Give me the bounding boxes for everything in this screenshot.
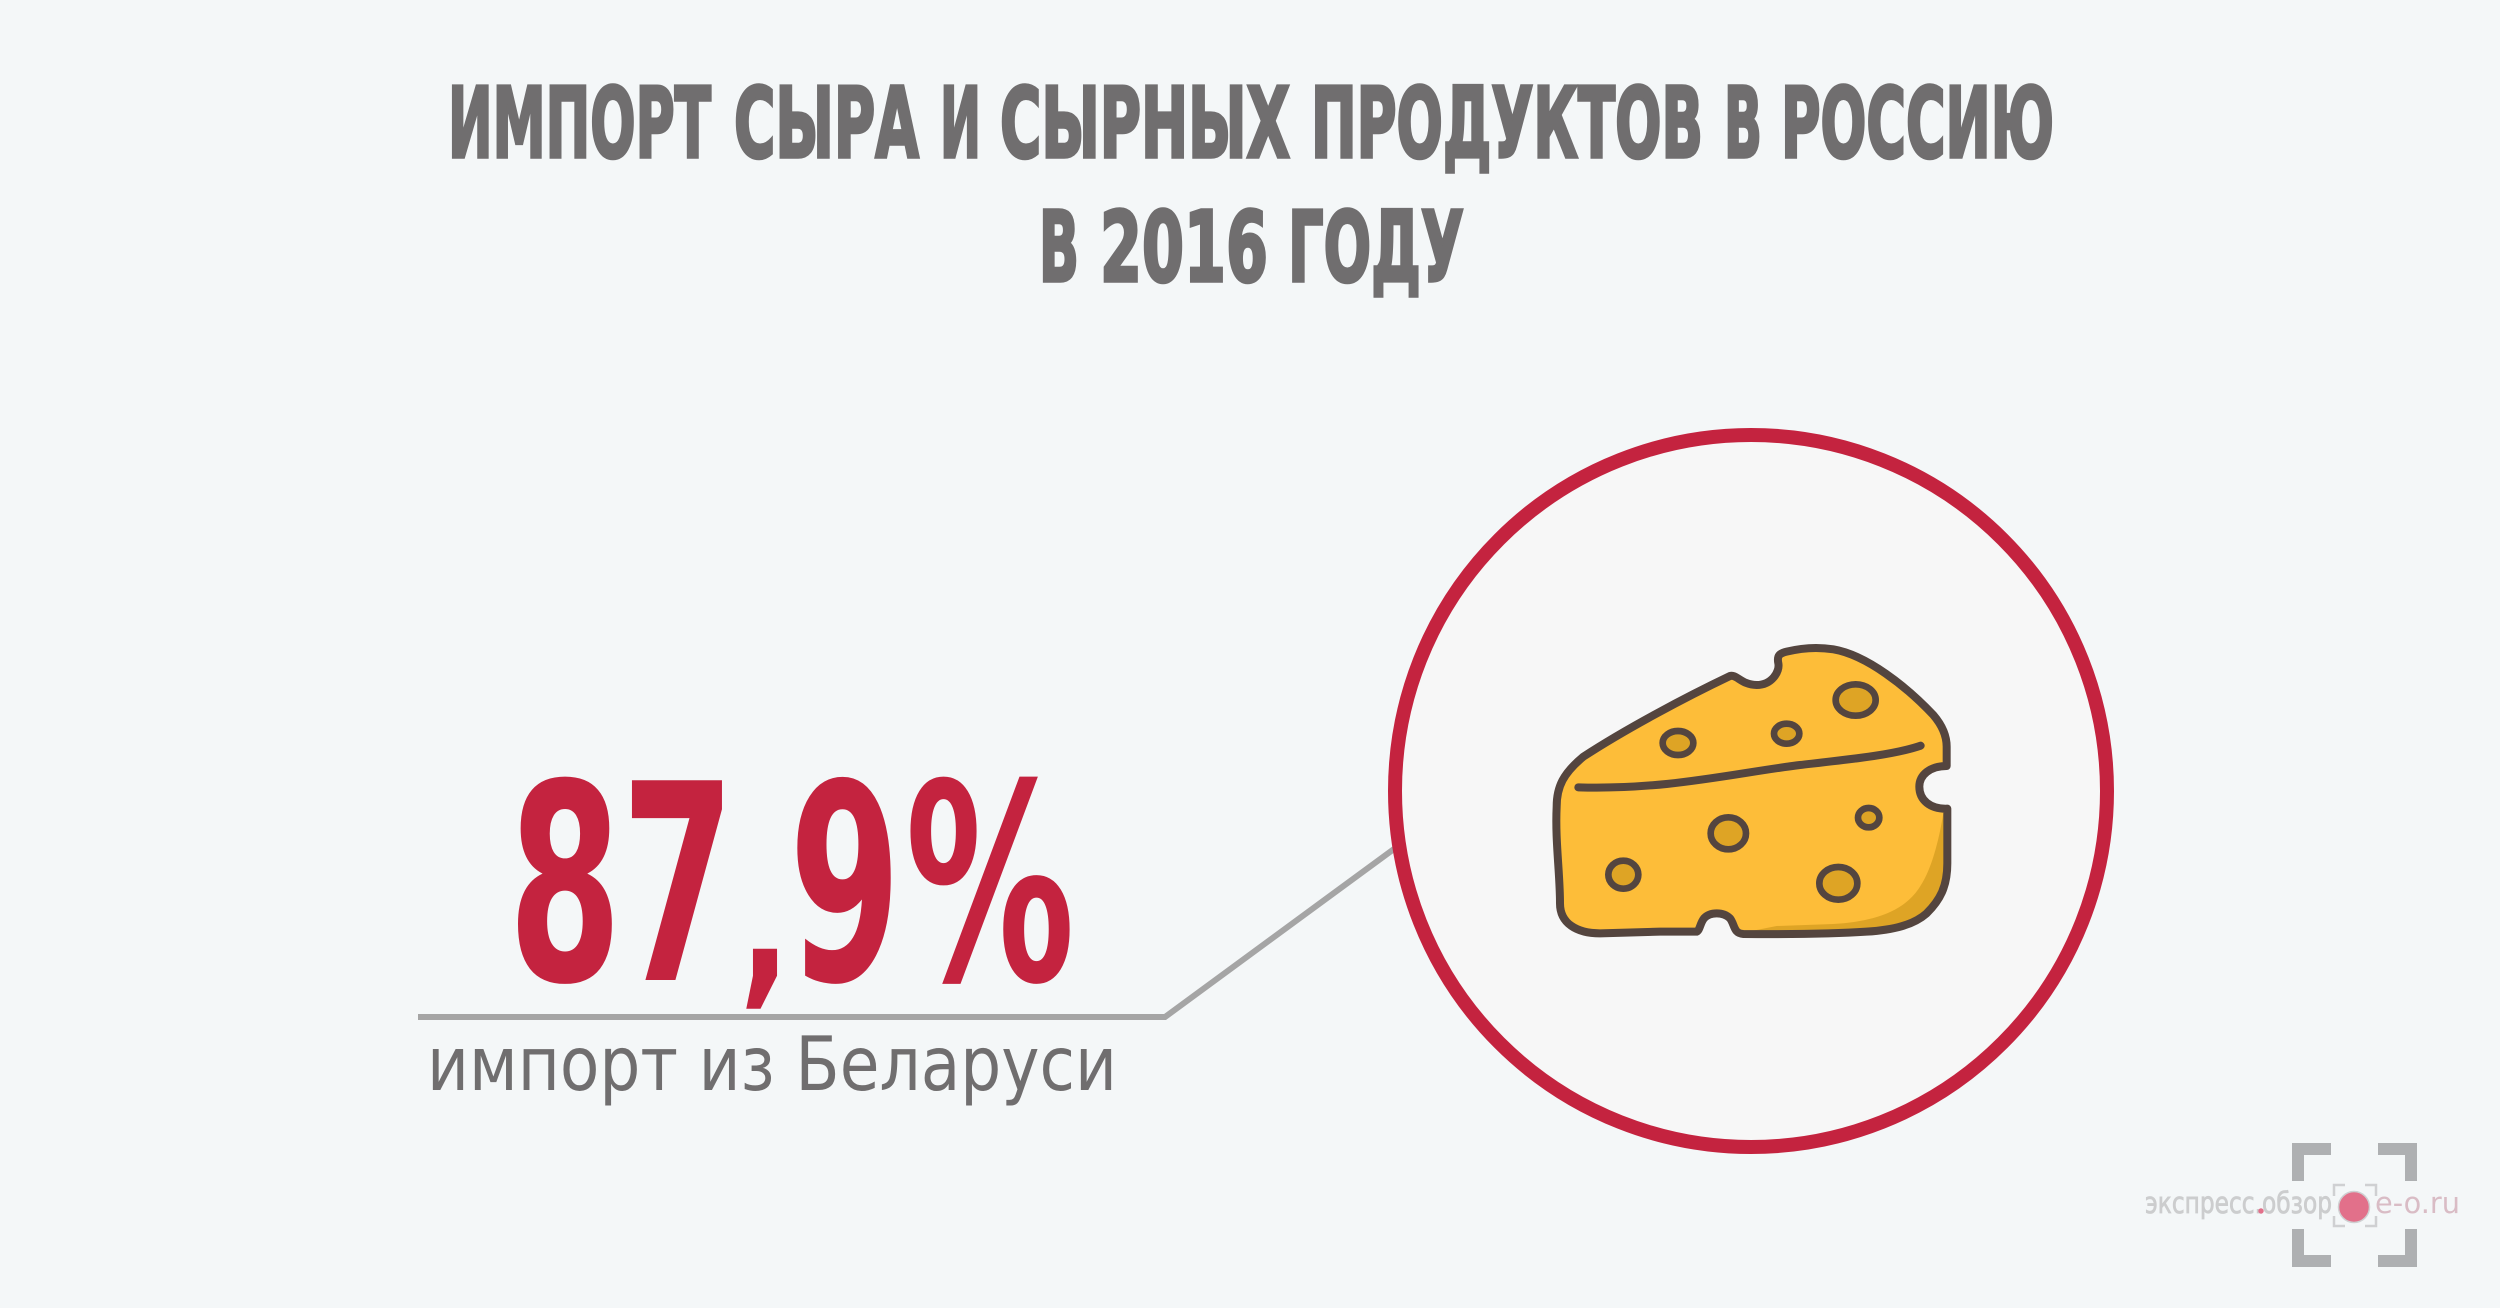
big number: 87,9%: % bbox=[905, 726, 1075, 1045]
title bbox=[448, 67, 2054, 304]
title: 2016 bbox=[1100, 191, 1268, 304]
logo domain: e-o.ru bbox=[2375, 1186, 2460, 1220]
title: СЫРА bbox=[734, 67, 919, 180]
watermark logo bbox=[2145, 1143, 2460, 1267]
icon: cheese bbox=[1556, 648, 1947, 934]
title: В bbox=[1724, 67, 1762, 180]
cheese body bbox=[1556, 648, 1947, 934]
title: ИМПОРТ bbox=[448, 67, 711, 180]
logo text: экспресс.обзор bbox=[2145, 1186, 2332, 1220]
caption: import from Belarus: импорт из Беларуси bbox=[427, 1020, 1117, 1108]
logo inner brackets bbox=[2334, 1185, 2376, 1226]
title: СЫРНЫХ bbox=[1000, 67, 1290, 180]
title: ГОДУ bbox=[1288, 191, 1464, 304]
logo red dot bbox=[2338, 1192, 2370, 1222]
connector line bbox=[418, 846, 1398, 1017]
logo small dot bbox=[2258, 1208, 2264, 1214]
logo outer brackets bbox=[2292, 1143, 2417, 1267]
title: РОССИЮ bbox=[1781, 67, 2054, 180]
cheese rind line bbox=[1578, 746, 1921, 788]
title: В bbox=[1039, 191, 1079, 304]
big number: 87,9%: , bbox=[739, 815, 791, 1026]
title: ПРОДУКТОВ bbox=[1311, 67, 1703, 180]
title: И bbox=[940, 67, 981, 180]
big number: 87,9%: 9 bbox=[789, 726, 901, 1045]
cheese holes bbox=[1608, 684, 1879, 900]
big number: 87,9% bbox=[508, 726, 1075, 1045]
big number: 87,9%: 8 bbox=[508, 726, 622, 1045]
big number: 87,9%: 7 bbox=[621, 726, 735, 1045]
red circle bbox=[1395, 435, 2107, 1147]
cheese outline bbox=[1556, 648, 1947, 934]
cheese shadow bbox=[1753, 810, 1947, 932]
